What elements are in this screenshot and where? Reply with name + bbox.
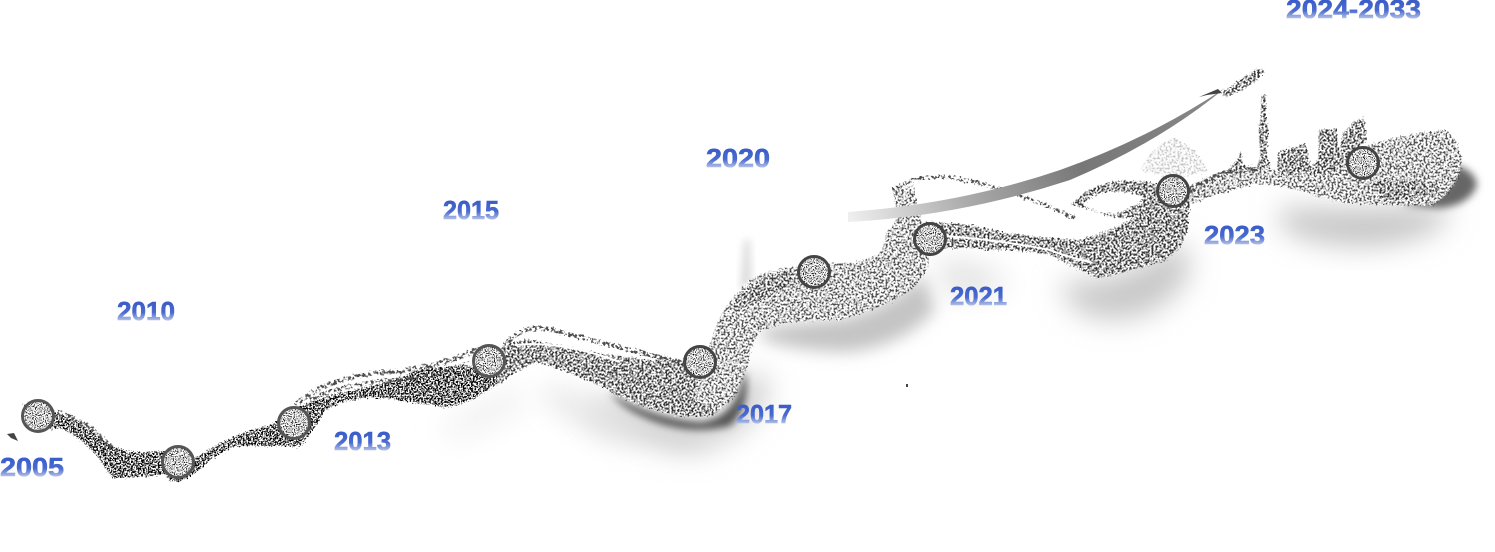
label 2010: 2010: [117, 296, 175, 326]
ribbon shadows: [440, 165, 1477, 452]
marker 2017: [684, 346, 716, 378]
stray ink specks: [7, 384, 908, 441]
airplane tail: [1199, 89, 1222, 97]
label 2017: 2017: [736, 399, 792, 429]
ribbon: darker patch: [733, 270, 791, 310]
icon: dome: [1226, 152, 1252, 172]
label 2021: 2021: [950, 281, 1007, 311]
label 2005: 2005: [0, 452, 64, 482]
ink ribbon: [22, 130, 1461, 482]
ribbon: thin ink strands: [58, 169, 1260, 448]
ribbon: dark section 2005-2010: [22, 400, 180, 478]
skyline: [1226, 95, 1366, 175]
icon: tower: [1256, 95, 1271, 168]
icon: towers: [1277, 118, 1366, 175]
ribbon: section 2023-2033: [1185, 130, 1461, 205]
marker 2021: [914, 224, 946, 254]
icon: faint tree: [1140, 138, 1207, 178]
label 2015: 2015: [443, 195, 499, 225]
marker 2020: [798, 256, 830, 288]
marker 2010: [162, 446, 194, 478]
marker 2023: [1158, 176, 1188, 206]
label 2023: 2023: [1204, 220, 1265, 250]
ribbon: upper loop: [1070, 181, 1172, 218]
marker 2015: [474, 346, 504, 376]
ribbon: dark section 2010-2015: [165, 352, 512, 482]
label 2013: 2013: [334, 426, 391, 456]
ribbon: section 2021-2023: [925, 195, 1190, 278]
ribbon: fading section 2015-2017: [495, 340, 730, 416]
ribbon: wide section 2017-2021: [695, 186, 930, 414]
marker 2024-2033: [1348, 148, 1378, 178]
ribbon: white streaks: [515, 236, 1090, 362]
label 2020: 2020: [706, 143, 770, 173]
markers: [22, 148, 1378, 478]
swoosh trail: [848, 88, 1225, 222]
airplane body: [1220, 68, 1264, 97]
marker 2005: [22, 400, 54, 432]
marker 2013: [278, 408, 310, 438]
icon: airplane: [1199, 68, 1264, 97]
ribbon: darker lower patch: [1370, 180, 1440, 200]
